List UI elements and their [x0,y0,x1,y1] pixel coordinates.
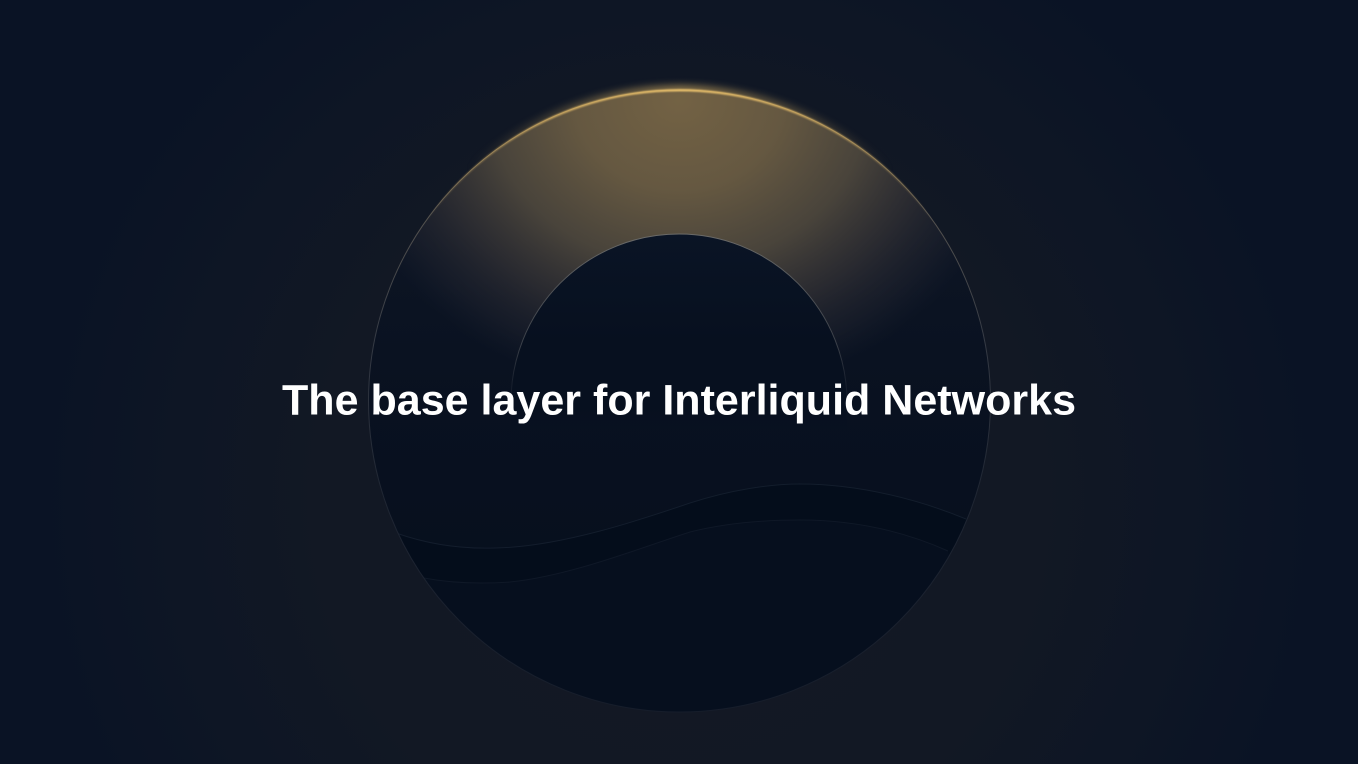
hero graphic [282,78,1074,764]
title: The base layer for Interliquid Networks [282,376,1076,424]
bright gold arc [425,90,934,222]
wave bands [399,484,966,584]
disc rim [368,90,990,712]
inner arch [511,234,847,450]
gold light band [412,90,946,338]
disc [368,88,991,712]
gold glow outside rim [470,90,889,171]
